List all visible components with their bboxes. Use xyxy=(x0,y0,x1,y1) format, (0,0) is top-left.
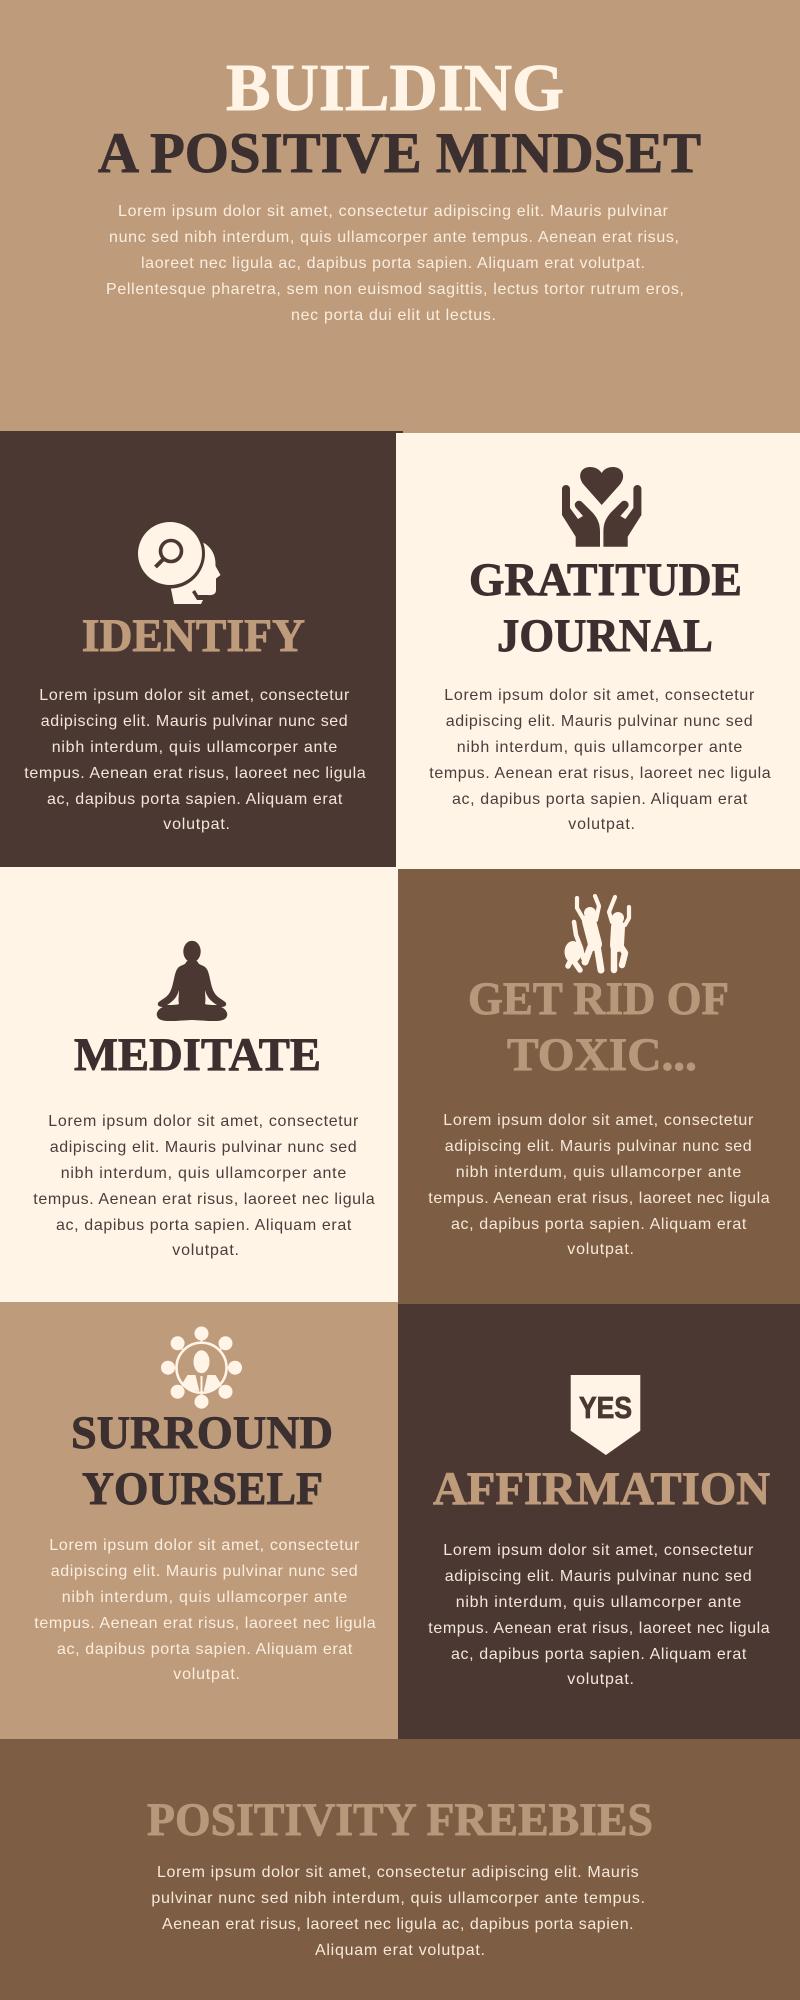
toxic text block: adipiscing elit. Mauris pulvinar nunc sed xyxy=(445,1138,752,1155)
surround text block: ac, dapibus porta sapien. Aliquam erat xyxy=(57,1641,353,1658)
icon: person surrounded by network xyxy=(161,1326,242,1409)
surround text block: nibh interdum, quis ullamcorper ante xyxy=(62,1589,347,1606)
surround text block: volutpat. xyxy=(173,1666,240,1683)
footer text block: Lorem ipsum dolor sit amet, consectetur adipiscing elit. Mauris xyxy=(157,1864,639,1881)
icon: meditating figure xyxy=(157,941,227,1021)
gratitude text block: volutpat. xyxy=(568,816,635,833)
icon: head with magnifier xyxy=(135,518,220,604)
meditate text block: Lorem ipsum dolor sit amet, consectetur xyxy=(48,1113,359,1130)
meditate text block: nibh interdum, quis ullamcorper ante xyxy=(61,1165,346,1182)
heading: get rid of toxic xyxy=(468,973,729,1081)
toxic text block: nibh interdum, quis ullamcorper ante xyxy=(456,1164,741,1181)
toxic text block xyxy=(428,1112,770,1258)
affirmation text block xyxy=(428,1542,770,1688)
panel: positivity freebies footer xyxy=(0,1739,800,2000)
panel: meditate xyxy=(0,867,398,1302)
heading: affirmation: AFFIRMATION xyxy=(433,1463,770,1515)
surround text block: tempus. Aenean erat risus, laoreet nec ligula xyxy=(34,1615,376,1632)
affirmation text block: tempus. Aenean erat risus, laoreet nec ligula xyxy=(428,1620,770,1637)
gratitude text block xyxy=(429,687,771,833)
title xyxy=(98,51,701,185)
heading: get rid of toxic: TOXIC... xyxy=(507,1029,697,1081)
meditate text block xyxy=(33,1113,375,1259)
meditate text block: adipiscing elit. Mauris pulvinar nunc sed xyxy=(50,1139,357,1156)
panel: surround yourself xyxy=(0,1302,398,1739)
identify text block: volutpat. xyxy=(163,816,230,833)
affirmation text block: adipiscing elit. Mauris pulvinar nunc sed xyxy=(445,1568,752,1585)
heading: meditate: MEDITATE xyxy=(74,1029,321,1081)
title: BUILDING xyxy=(226,51,564,125)
identify text block: tempus. Aenean erat risus, laoreet nec ligula xyxy=(24,765,366,782)
header text block: nunc sed nibh interdum, quis ullamcorper ante tempus. Aenean erat risus, xyxy=(109,229,679,246)
affirmation text block: Lorem ipsum dolor sit amet, consectetur xyxy=(443,1542,754,1559)
panel: header xyxy=(0,0,800,433)
affirmation text block: ac, dapibus porta sapien. Aliquam erat xyxy=(451,1646,747,1663)
header text block: Pellentesque pharetra, sem non euismod sagittis, lectus tortor rutrum eros, xyxy=(106,281,684,298)
toxic text block: tempus. Aenean erat risus, laoreet nec ligula xyxy=(428,1190,770,1207)
gratitude text block: tempus. Aenean erat risus, laoreet nec ligula xyxy=(429,765,771,782)
identify text block: nibh interdum, quis ullamcorper ante xyxy=(52,739,337,756)
panel: gratitude journal xyxy=(396,433,800,869)
identify text block: adipiscing elit. Mauris pulvinar nunc sed xyxy=(41,713,348,730)
footer text block xyxy=(151,1864,645,1959)
affirmation text block: volutpat. xyxy=(567,1671,634,1688)
footer text block: pulvinar nunc sed nibh interdum, quis ullamcorper ante tempus. xyxy=(151,1890,645,1907)
header text block: laoreet nec ligula ac, dapibus porta sapien. Aliquam erat volutpat. xyxy=(141,255,645,272)
panel: identify xyxy=(0,431,403,867)
footer text block: Aliquam erat volutpat. xyxy=(315,1942,485,1959)
meditate text block: volutpat. xyxy=(172,1242,239,1259)
heading: surround yourself: YOURSELF xyxy=(82,1463,323,1515)
identify text block: Lorem ipsum dolor sit amet, consectetur xyxy=(39,687,350,704)
surround text block: adipiscing elit. Mauris pulvinar nunc sed xyxy=(51,1563,358,1580)
panel: affirmation xyxy=(398,1304,800,1739)
header text block xyxy=(106,203,684,324)
toxic text block: volutpat. xyxy=(567,1241,634,1258)
heading: gratitude journal: GRATITUDE xyxy=(469,554,742,606)
identify text block xyxy=(24,687,366,833)
icon: hands holding heart xyxy=(562,467,641,547)
heading: positivity freebies: POSITIVITY FREEBIES xyxy=(147,1794,653,1846)
gratitude text block: nibh interdum, quis ullamcorper ante xyxy=(457,739,742,756)
gratitude text block: Lorem ipsum dolor sit amet, consectetur xyxy=(444,687,755,704)
icon: yes badge xyxy=(571,1375,640,1455)
title: A POSITIVE MINDSET xyxy=(98,122,701,185)
toxic text block: Lorem ipsum dolor sit amet, consectetur xyxy=(443,1112,754,1129)
footer text block: Aenean erat risus, laoreet nec ligula ac, dapibus porta sapien. xyxy=(162,1916,634,1933)
heading: surround yourself xyxy=(71,1407,333,1515)
toxic text block: ac, dapibus porta sapien. Aliquam erat xyxy=(451,1216,747,1233)
heading: gratitude journal: JOURNAL xyxy=(497,610,713,662)
surround text block: Lorem ipsum dolor sit amet, consectetur xyxy=(49,1537,360,1554)
heading: get rid of toxic: GET RID OF xyxy=(468,973,729,1025)
icon: group of people with raised arms xyxy=(564,896,629,970)
meditate text block: tempus. Aenean erat risus, laoreet nec ligula xyxy=(33,1191,375,1208)
meditate text block: ac, dapibus porta sapien. Aliquam erat xyxy=(56,1217,352,1234)
header text block: Lorem ipsum dolor sit amet, consectetur adipiscing elit. Mauris pulvinar xyxy=(118,203,669,220)
heading: identify: IDENTIFY xyxy=(82,610,305,662)
heading: gratitude journal xyxy=(469,554,742,662)
panel: get rid of toxic xyxy=(398,869,800,1304)
icon: yes badge: YES xyxy=(579,1390,632,1425)
gratitude text block: adipiscing elit. Mauris pulvinar nunc sed xyxy=(446,713,753,730)
header text block: nec porta dui elit ut lectus. xyxy=(291,307,496,324)
heading: surround yourself: SURROUND xyxy=(71,1407,333,1459)
gratitude text block: ac, dapibus porta sapien. Aliquam erat xyxy=(452,791,748,808)
affirmation text block: nibh interdum, quis ullamcorper ante xyxy=(456,1594,741,1611)
surround text block xyxy=(34,1537,376,1683)
identify text block: ac, dapibus porta sapien. Aliquam erat xyxy=(47,791,343,808)
